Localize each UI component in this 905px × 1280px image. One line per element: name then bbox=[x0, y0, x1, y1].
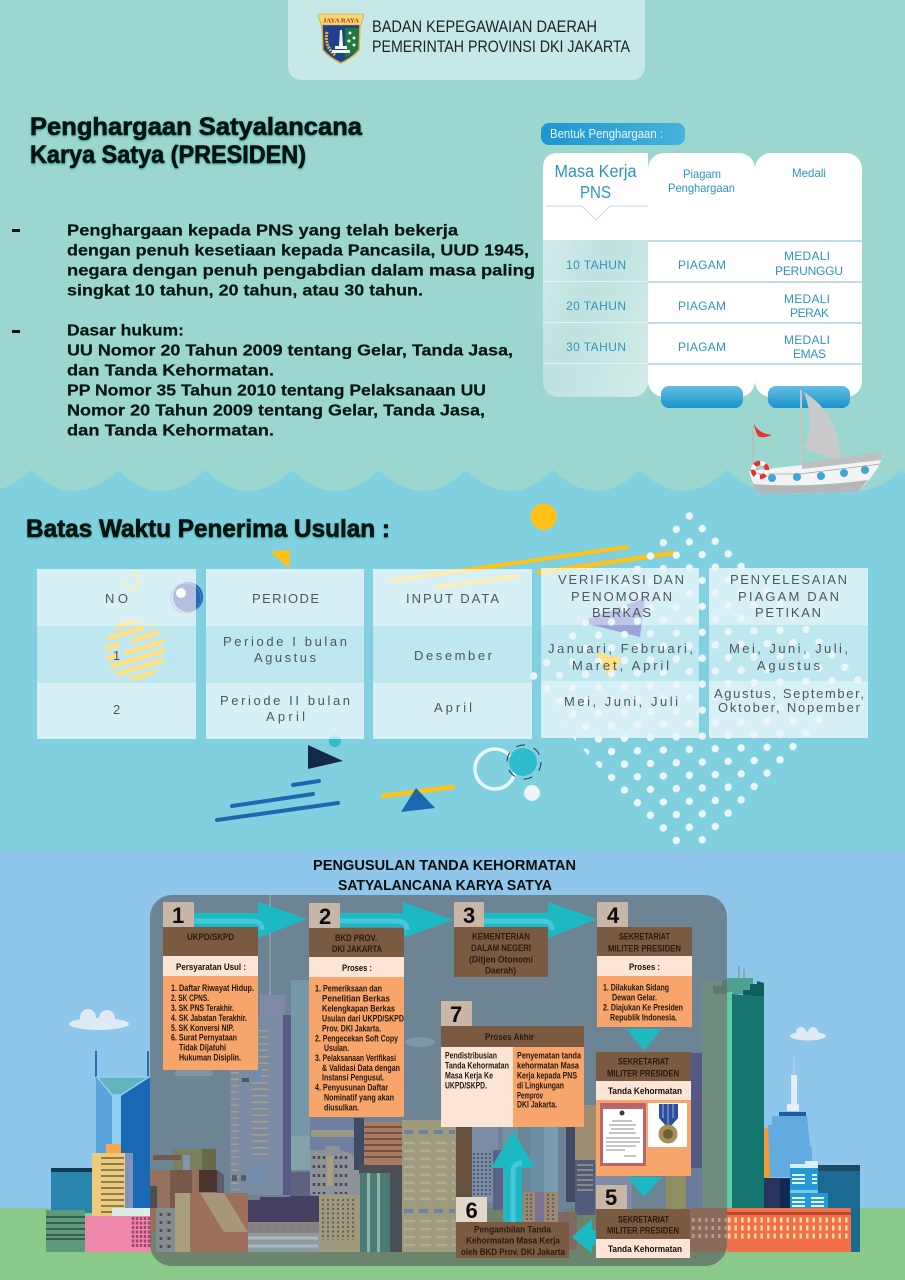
step 3: Kementerian Dalam Negeri: Daerah) bbox=[485, 966, 516, 976]
step 6: pengambilan tanda kehormatan: oleh BKD Prov. DKI Jakarta bbox=[461, 1247, 566, 1257]
step 4: Sekretariat Militer Presiden: 2. Diajukan Ke Presiden bbox=[603, 1002, 683, 1012]
column: masa kerja bbox=[543, 153, 648, 397]
step 2: BKD Prov. DKI Jakarta bbox=[309, 903, 404, 1117]
illustration: buildings inside panel bbox=[150, 895, 727, 1266]
column: piagam penghargaan: PIAGAM bbox=[678, 258, 726, 272]
step 1: UKPD/SKPD: 4. SK Jabatan Terakhir. bbox=[171, 1013, 247, 1023]
text block: description and legal basis bbox=[12, 222, 535, 440]
title: pengusulan tanda kehormatan bbox=[313, 858, 576, 894]
step 7: proses akhir: Masa Kerja Ke bbox=[445, 1070, 493, 1080]
step 1: UKPD/SKPD: 3. SK PNS Terakhir. bbox=[171, 1003, 234, 1013]
step 4: Sekretariat Militer Presiden: MILITER PRESIDEN bbox=[608, 944, 681, 954]
text block: description and legal basis: UU Nomor 20 Tahun 2009 tentang Gelar, Tanda Jasa, bbox=[67, 342, 513, 360]
table text: batas waktu: April bbox=[434, 700, 472, 715]
step 4: Sekretariat Militer Presiden: 1. Dilakukan Sidang bbox=[603, 982, 669, 992]
step 4: Sekretariat Militer Presiden: SEKRETARIAT bbox=[619, 932, 670, 942]
box: tanda kehormatan with certificate and medal bbox=[596, 1052, 691, 1176]
image: certificate bbox=[600, 1103, 646, 1166]
column: medali: PERUNGGU bbox=[775, 264, 843, 278]
title: Penghargaan Satyalancana bbox=[30, 113, 363, 141]
step 7: proses akhir: kehormatan Masa bbox=[517, 1060, 580, 1070]
step 1: UKPD/SKPD: 2. SK CPNS. bbox=[171, 993, 209, 1003]
step number 7: 7 bbox=[450, 1002, 462, 1027]
step 2: BKD Prov. DKI Jakarta: & Validasi Data dengan bbox=[322, 1063, 400, 1073]
step 2: BKD Prov. DKI Jakarta: Proses : bbox=[342, 963, 372, 974]
step 1: UKPD/SKPD: Persyaratan Usul : bbox=[176, 962, 246, 973]
step 1: UKPD/SKPD bbox=[163, 902, 258, 1070]
title bbox=[30, 113, 363, 169]
text block: description and legal basis: singkat 10 tahun, 20 tahun, atau 30 tahun. bbox=[67, 282, 423, 300]
step 2: BKD Prov. DKI Jakarta: diusulkan. bbox=[324, 1102, 359, 1112]
step 2: BKD Prov. DKI Jakarta: Usulan. bbox=[324, 1043, 349, 1053]
table text: batas waktu: Agustus bbox=[254, 650, 316, 665]
step number 1 bbox=[163, 902, 194, 928]
table text: batas waktu: Agustus, September, bbox=[714, 686, 864, 701]
step number 2 bbox=[309, 903, 340, 929]
heading: batas waktu: Batas Waktu Penerima Usulan : bbox=[26, 515, 390, 543]
step 7: proses akhir bbox=[441, 1001, 584, 1127]
step 1: UKPD/SKPD: Tidak Dijatuhi bbox=[179, 1042, 226, 1052]
step 4: Sekretariat Militer Presiden: Dewan Gelar. bbox=[612, 992, 657, 1002]
dotted diamond pattern bbox=[520, 503, 870, 848]
step number 6: 6 bbox=[466, 1198, 478, 1223]
table text: batas waktu: 2 bbox=[113, 702, 120, 717]
step number 2: 2 bbox=[319, 904, 331, 929]
step 7: proses akhir: DKI Jakarta. bbox=[517, 1100, 557, 1110]
box: tanda kehormatan with certificate and medal: MILITER PRESIDEN bbox=[607, 1068, 679, 1078]
step number 3: 3 bbox=[463, 903, 475, 928]
table text: batas waktu: PENYELESAIAN bbox=[730, 572, 847, 587]
step 7: proses akhir: Pendistribusian bbox=[445, 1050, 497, 1060]
column: masa kerja: Masa Kerja bbox=[554, 161, 637, 181]
table text: batas waktu: INPUT DATA bbox=[406, 591, 499, 606]
step 2: BKD Prov. DKI Jakarta: 4. Penyusunan Daftar bbox=[315, 1082, 388, 1092]
button: piagam bbox=[661, 386, 743, 408]
table text: batas waktu: 1 bbox=[113, 648, 120, 663]
step number 7 bbox=[441, 1001, 472, 1027]
decorative shapes below table bbox=[217, 745, 541, 820]
step 2: BKD Prov. DKI Jakarta: Kelengkapan Berkas bbox=[322, 1004, 395, 1014]
column: masa kerja: PNS bbox=[580, 182, 611, 202]
table text: batas waktu: Maret, April bbox=[572, 658, 669, 673]
organisation name: PEMERINTAH PROVINSI DKI JAKARTA bbox=[372, 37, 631, 56]
text block: description and legal basis: negara dengan penuh pengabdian dalam masa paling bbox=[67, 262, 535, 280]
step 2: BKD Prov. DKI Jakarta: Penelitian Berkas bbox=[322, 994, 390, 1004]
column: medali: MEDALI bbox=[784, 249, 830, 263]
step 4: Sekretariat Militer Presiden bbox=[597, 902, 692, 1027]
step 7: proses akhir: UKPD/SKPD. bbox=[445, 1080, 487, 1090]
column: piagam penghargaan: PIAGAM bbox=[678, 340, 726, 354]
table text: batas waktu: Mei, Juni, Juli, bbox=[729, 641, 848, 656]
step 5: Sekretariat Militer Presiden: MILITER PRESIDEN bbox=[607, 1226, 679, 1236]
table text: batas waktu: PERIODE bbox=[252, 591, 319, 606]
title: pengusulan tanda kehormatan: SATYALANCANA KARYA SATYA bbox=[338, 878, 553, 894]
text block: description and legal basis: dan Tanda Kehormatan. bbox=[67, 422, 274, 440]
step 1: UKPD/SKPD: Hukuman Disiplin. bbox=[179, 1052, 241, 1062]
header panel bbox=[288, 0, 645, 80]
table text: batas waktu: Desember bbox=[414, 648, 493, 663]
table text: batas waktu: BERKAS bbox=[592, 605, 651, 620]
column: piagam penghargaan: PIAGAM bbox=[678, 299, 726, 313]
background: middle blue section bbox=[0, 471, 905, 851]
arrow: step 3 to 4 bbox=[480, 902, 597, 938]
step 2: BKD Prov. DKI Jakarta: DKI JAKARTA bbox=[332, 944, 382, 954]
step 7: proses akhir: Penyematan tanda bbox=[517, 1050, 582, 1060]
arrow: step 4 down bbox=[626, 1029, 662, 1050]
step 7: proses akhir: Tanda Kehormatan bbox=[445, 1060, 509, 1070]
table text: batas waktu: NO bbox=[105, 591, 128, 606]
step 6: pengambilan tanda kehormatan: Kehormatan Masa Kerja bbox=[466, 1236, 561, 1246]
organisation name bbox=[372, 17, 631, 56]
text block: description and legal basis: Dasar hukum: bbox=[67, 322, 184, 340]
illustration: right skyline outside panel bbox=[727, 966, 860, 1252]
organisation name: BADAN KEPEGAWAIAN DAERAH bbox=[372, 17, 597, 36]
step 7: proses akhir: Pemprov bbox=[517, 1090, 543, 1100]
step 5: Sekretariat Militer Presiden bbox=[596, 1185, 690, 1258]
step 6: pengambilan tanda kehormatan bbox=[456, 1197, 569, 1258]
step 1: UKPD/SKPD: 6. Surat Pernyataan bbox=[171, 1032, 237, 1042]
table text: batas waktu bbox=[105, 572, 864, 724]
text block: description and legal basis: Penghargaan kepada PNS yang telah bekerja bbox=[67, 222, 458, 240]
icon: sailing boat bbox=[749, 390, 883, 494]
step 7: proses akhir: di Lingkungan bbox=[517, 1080, 564, 1090]
step 5: Sekretariat Militer Presiden: SEKRETARIAT bbox=[618, 1214, 669, 1224]
table text: batas waktu: VERIFIKASI DAN bbox=[558, 572, 684, 587]
step 1: UKPD/SKPD: 1. Daftar Riwayat Hidup. bbox=[171, 983, 254, 993]
step 5: Sekretariat Militer Presiden: Tanda Kehormatan bbox=[608, 1244, 682, 1255]
column: medali bbox=[755, 153, 862, 397]
column: medali: MEDALI bbox=[784, 292, 830, 306]
column: piagam penghargaan: Piagam bbox=[683, 167, 721, 181]
arrow: step 2 to 3 bbox=[336, 902, 453, 938]
arrow: step 5 to 6 bbox=[572, 1219, 596, 1253]
table text: batas waktu: Agustus bbox=[757, 658, 820, 673]
text block: description and legal basis: Nomor 20 Tahun 2009 tentang Gelar, Tanda Jasa, bbox=[67, 402, 485, 420]
label pill: Bentuk Penghargaan: Bentuk Penghargaan : bbox=[550, 127, 663, 141]
icon: DKI Jakarta emblem bbox=[318, 14, 364, 63]
table text: batas waktu: Mei, Juni, Juli bbox=[564, 694, 678, 709]
illustration: left skyline outside panel bbox=[46, 1009, 152, 1252]
column: masa kerja: 10 TAHUN bbox=[566, 258, 626, 272]
step 2: BKD Prov. DKI Jakarta: Instansi Pengusul. bbox=[322, 1072, 384, 1082]
step number 5: 5 bbox=[605, 1185, 617, 1210]
step 3: Kementerian Dalam Negeri: (Ditjen Otonomi bbox=[469, 954, 533, 964]
image: medal bbox=[648, 1103, 687, 1147]
column: piagam penghargaan: Penghargaan bbox=[668, 181, 735, 195]
step number 4: 4 bbox=[607, 903, 620, 928]
table text: batas waktu: Januari, Februari, bbox=[548, 641, 693, 656]
table text: batas waktu: Periode II bulan bbox=[220, 693, 350, 708]
column: masa kerja: 20 TAHUN bbox=[566, 299, 626, 313]
box: tanda kehormatan with certificate and medal: Tanda Kehormatan bbox=[608, 1086, 682, 1097]
step 3: Kementerian Dalam Negeri: KEMENTERIAN bbox=[472, 932, 530, 942]
panel: bentuk penghargaan table bbox=[541, 123, 862, 408]
table text: batas waktu: Periode I bulan bbox=[223, 634, 347, 649]
step 3: Kementerian Dalam Negeri: DALAM NEGERI bbox=[471, 943, 531, 953]
step 6: pengambilan tanda kehormatan: Pengambilan Tanda bbox=[474, 1224, 552, 1234]
step 2: BKD Prov. DKI Jakarta: Prov. DKI Jakarta. bbox=[322, 1024, 381, 1034]
step 7: proses akhir: Proses Akhir bbox=[485, 1032, 534, 1042]
arrow: to step 5 bbox=[627, 1177, 662, 1197]
arrow: step 1 to 2 bbox=[190, 902, 307, 938]
background: ground bbox=[0, 1208, 905, 1280]
table text: batas waktu: PETIKAN bbox=[755, 605, 821, 620]
text block: description and legal basis: PP Nomor 35 Tahun 2010 tentang Pelaksanaan UU bbox=[67, 382, 486, 400]
column: medali: MEDALI bbox=[784, 333, 830, 347]
step 2: BKD Prov. DKI Jakarta: 2. Pengecekan Soft Copy bbox=[315, 1034, 398, 1044]
table cells: batas waktu bbox=[37, 568, 868, 739]
step 2: BKD Prov. DKI Jakarta: BKD PROV. bbox=[335, 933, 377, 943]
background: top teal section bbox=[0, 0, 905, 475]
title: pengusulan tanda kehormatan: PENGUSULAN TANDA KEHORMATAN bbox=[313, 858, 576, 874]
title: Karya Satya (PRESIDEN) bbox=[30, 141, 306, 169]
column: medali: EMAS bbox=[793, 347, 826, 361]
step number 1: 1 bbox=[172, 903, 184, 928]
step 2: BKD Prov. DKI Jakarta: 3. Pelaksanaan Verifikasi bbox=[315, 1053, 396, 1063]
step 1: UKPD/SKPD: 5. SK Konversi NIP. bbox=[171, 1023, 234, 1033]
text block: description and legal basis: dengan penuh kesetiaan kepada Pancasila, UUD 1945, bbox=[67, 242, 529, 260]
button: medali bbox=[768, 386, 850, 408]
table text: batas waktu: PIAGAM DAN bbox=[738, 589, 839, 604]
step 2: BKD Prov. DKI Jakarta: Nominatif yang akan bbox=[324, 1092, 394, 1102]
step 3: Kementerian Dalam Negeri bbox=[454, 902, 548, 977]
column: medali: PERAK bbox=[790, 306, 829, 320]
column: medali: Medali bbox=[792, 166, 826, 180]
arrow: step 6 up to 7 bbox=[491, 1131, 535, 1225]
table text: batas waktu: April bbox=[266, 709, 305, 724]
background: sky bbox=[0, 850, 905, 1208]
label pill: Bentuk Penghargaan bbox=[541, 123, 685, 145]
text block: description and legal basis: dan Tanda Kehormatan. bbox=[67, 362, 274, 380]
table text: batas waktu: PENOMORAN bbox=[571, 589, 672, 604]
step 7: proses akhir: Kerja kepada PNS bbox=[517, 1070, 577, 1080]
box: tanda kehormatan with certificate and medal: SEKRETARIAT bbox=[618, 1056, 669, 1066]
step 2: BKD Prov. DKI Jakarta: Usulan dari UKPD/SKPD bbox=[322, 1014, 404, 1024]
scalloped wave divider bbox=[0, 460, 905, 491]
step 2: BKD Prov. DKI Jakarta: 1. Pemeriksaan dan bbox=[315, 984, 382, 994]
column: piagam penghargaan bbox=[648, 153, 755, 397]
step 4: Sekretariat Militer Presiden: Proses : bbox=[629, 962, 660, 973]
icon: DKI Jakarta emblem: JAYA RAYA bbox=[323, 18, 359, 24]
step 1: UKPD/SKPD: UKPD/SKPD bbox=[187, 932, 234, 942]
table text: batas waktu: Oktober, Nopember bbox=[718, 700, 861, 715]
column: masa kerja: 30 TAHUN bbox=[566, 340, 626, 354]
panel: flow background bbox=[150, 895, 727, 1266]
step 4: Sekretariat Militer Presiden: Republik Indonesia. bbox=[610, 1012, 677, 1022]
decorative shapes behind table bbox=[93, 504, 673, 747]
